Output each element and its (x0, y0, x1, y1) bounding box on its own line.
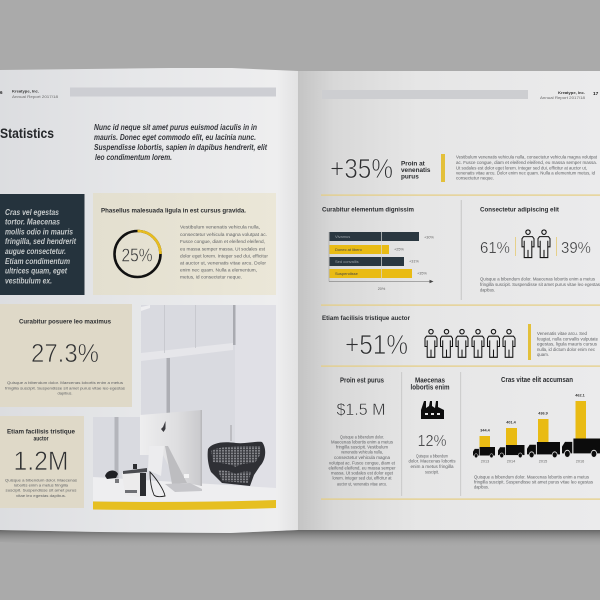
paragraph: +51%: Venenatis vitae arcu. Sed (537, 331, 588, 336)
stat: +35%: +35% (330, 153, 393, 184)
heading: bar chart: Curabitur elementum dignissim (322, 206, 414, 214)
horizontal bar chart: Suspendisse (335, 271, 359, 276)
horizontal bar chart: Sed convallis (335, 259, 359, 264)
page number left: 6 (0, 90, 3, 95)
truck bar chart: 401.4 (506, 420, 517, 424)
horizontal bar chart: +25% (394, 248, 404, 252)
running header left: Kreatype, Inc. (12, 90, 39, 94)
running header left (12, 90, 58, 99)
horizontal bar chart: +31% (409, 260, 419, 264)
label: proin at venenatis purus: venenatis (401, 167, 431, 174)
donut chart 25% (114, 231, 160, 277)
column: $1.5 M: Proin est purus (340, 378, 384, 384)
card paragraph: eu massa semper massa. Ut sodales est (180, 246, 266, 252)
gender split stat: 61% (480, 240, 510, 257)
column: 12% (408, 378, 456, 474)
card paragraph: Fusce congue, diam et eleifend eleifend, (180, 239, 265, 244)
card paragraph: enim nec quam. Nulla a elementum, (180, 268, 257, 272)
paragraph: +51% (537, 331, 599, 357)
panel: 27.3% stat (0, 304, 132, 407)
column: $1.5 M: $1.5 M (336, 400, 386, 419)
column: $1.5 M: venenatis vehicula nulla, (341, 450, 383, 454)
gender split stat: 39% (561, 240, 591, 257)
column: truck chart: Cras vitae elit accumsan (501, 377, 573, 384)
heading: +51%: Etiam facilisis tristique auctor (322, 315, 410, 322)
card paragraph: dolor eget lorem. Integer sed dui, efficitur (180, 254, 269, 258)
yellow band under photo (93, 500, 276, 510)
paragraph: +51%: nulla, id dictum dolor enim nec (537, 347, 595, 352)
label: proin at venenatis purus: purus (401, 174, 419, 180)
computer (140, 410, 202, 492)
column: truck chart: dapibus. (474, 484, 489, 490)
horizontal bar chart: 20% (378, 287, 386, 291)
panel: donut card (93, 193, 276, 295)
truck bar chart: 2013 (481, 460, 489, 464)
card paragraph: consectetur vehicula magna volutpat ac. (180, 232, 267, 237)
intro text: mauris. Donec eget commodo elit, eu lacinia nunc. (94, 132, 256, 142)
panel: 1.2M stat: lobortis enim a metus fringilla (14, 482, 69, 488)
column: $1.5 M: consectetur vehicula magna (334, 455, 391, 460)
column: $1.5 M: auctor ut, venenatis vitae arcu. (337, 482, 387, 486)
running header right: Kreatype, Inc. (558, 91, 585, 95)
panel: 27.3% stat: Quisque a bibendum dolor. Maecenas lobortis enim a metus (7, 380, 123, 385)
horizontal bar chart: +30% (424, 236, 434, 240)
truck bar chart: 344.4 (480, 428, 491, 432)
panel: dark quote: Etiam condimentum (5, 257, 70, 266)
panel: 27.3% stat: fringilla suscipit. Suspendisse sit amet purus vitae leo egestas (5, 386, 125, 390)
card heading: Phasellus malesuada ligula in est cursus gravida. (101, 208, 246, 214)
truck bar chart: 2014 (507, 460, 515, 464)
column: truck chart: fringilla suscipit. Suspendisse sit amet purus vitae leo egestas (474, 480, 593, 484)
panel: 1.2M stat (0, 416, 84, 508)
photo: office desk with computer and chair (93, 305, 276, 501)
column: 12%: lobortis enim (410, 384, 450, 392)
label: proin at venenatis purus (401, 160, 431, 180)
running header left: Annual Report 2017/18 (12, 95, 58, 99)
column: $1.5 M: Quisque a bibendum dolor. (340, 434, 384, 440)
horizontal bar chart: Vivamus (335, 234, 350, 239)
running header right: Annual Report 2017/18 (540, 96, 585, 100)
panel: 1.2M stat: Etiam facilisis tristique (7, 428, 75, 436)
card paragraph (180, 224, 269, 280)
column: 12%: dolor. Maecenas lobortis (408, 458, 456, 464)
panel: right page (298, 71, 600, 530)
chair (208, 442, 265, 486)
intro text (94, 122, 268, 162)
truck bar chart: 462.1 (575, 394, 585, 398)
column: $1.5 M (328, 378, 396, 486)
panel: dark quote: Cras vel egestas (5, 208, 60, 217)
truck bar chart: 2016 (576, 460, 584, 464)
column: $1.5 M: lorem. Integer sed dui, efficitur at (332, 476, 392, 480)
paragraph: gender split: fringilla suscipit. Suspendisse sit amet purus vitae leo egestas (480, 282, 600, 287)
running header right (540, 91, 585, 100)
yellow divider (441, 154, 445, 182)
column: truck chart: Quisque a bibendum dolor. Maecenas lobortis enim a metus (474, 474, 589, 480)
intro text: leo condimentum lorem. (95, 152, 172, 162)
paragraph: +35% (456, 154, 598, 180)
people icon row (425, 329, 515, 357)
intro text: Nunc id neque sit amet purus euismod iaculis in in (94, 122, 257, 132)
header bar left (70, 88, 276, 96)
label: proin at venenatis purus: Proin at (401, 160, 426, 168)
panel: dark quote: vestibulum ex. (5, 276, 52, 286)
truck bar chart (473, 394, 600, 464)
icon: factory (421, 401, 444, 419)
paragraph: +51%: feugiat, nulla convallis vulputate (537, 336, 599, 342)
horizontal bar chart: Donec at libero (335, 247, 363, 252)
paragraph: +35%: venenatis vitae arcu. Dolor enim nec quam. Nulla a elementum metus, id (456, 170, 596, 176)
panel: 27.3% stat: dapibus. (58, 390, 72, 396)
panel: dark quote (0, 194, 84, 295)
paragraph: +51%: quam. (537, 352, 549, 357)
title: Statistics (0, 125, 54, 141)
card paragraph: metus, id consectetur neque. (180, 274, 242, 280)
card paragraph: at auctor ut, venenatis vitae arcu. Dolor (180, 260, 267, 266)
paragraph: gender split (480, 276, 600, 292)
paragraph: +35%: ac. Fusce congue, diam et eleifend eleifend, eu massa semper massa. (456, 160, 597, 165)
column: 12%: enim a metus fringilla (410, 464, 454, 469)
paragraph: +51%: egestas, ligula mauris cursus (537, 342, 597, 346)
panel: dark quote: tortor. Maecenas (5, 218, 61, 226)
intro text: Suspendisse lobortis, sapien in dapibus hendrerit, elit (94, 142, 268, 152)
wall and cabinets (93, 305, 276, 501)
paragraph: gender split: Quisque a bibendum dolor. Maecenas lobortis enim a metus (480, 276, 595, 282)
column: truck chart (473, 377, 600, 490)
column: 12%: Quisque a bibendum (416, 454, 448, 458)
horizontal bar chart (329, 231, 434, 291)
paragraph: +35%: Ut sodales est dolor eget lorem. Integer sed dui, efficitur at auctor ut, (456, 166, 587, 170)
paragraph: gender split: dapibus. (480, 288, 495, 292)
card paragraph: Vestibulum venenatis vehicula nulla, (180, 224, 260, 230)
panel: 1.2M stat: auctor (34, 436, 49, 442)
column: $1.5 M: fringilla suscipit. Vestibulum (336, 444, 389, 450)
column: 12%: 12% (418, 433, 447, 450)
page number right: 17 (593, 91, 599, 97)
panel: 1.2M stat: Quisque a bibendum dolor. Maecenas (5, 478, 77, 482)
desk (93, 477, 276, 501)
panel: dark quote: ultrices quam, eget (5, 266, 67, 276)
truck bar chart: 2015 (539, 460, 547, 464)
page shadow (0, 530, 600, 547)
paragraph: +35%: Vestibulum venenatis vehicula nulla, consectetur vehicula magna volutpat (456, 154, 598, 160)
column: 12%: suscipit. (425, 470, 439, 474)
panel: dark quote: mollis odio in mauris (5, 228, 74, 236)
gender split stat (480, 230, 591, 258)
stat: +51%: +51% (345, 329, 408, 360)
panel: dark quote: augue consectetur. (5, 247, 66, 256)
panel: 27.3% stat: Curabitur posuere leo maximus (19, 318, 111, 326)
truck bar chart: 436.9 (538, 412, 548, 416)
panel: 1.2M stat: vitae leo egestas dapibus. (16, 493, 66, 498)
donut chart 25%: 25% (122, 246, 152, 266)
column: 12%: Maecenas (415, 378, 445, 384)
paragraph: +35%: consectetur neque. (456, 176, 494, 180)
column: $1.5 M: massa. Ut sodales est dolor eget (331, 470, 394, 476)
horizontal bar chart: +35% (417, 272, 427, 276)
yellow divider (528, 324, 531, 360)
column: $1.5 M: volutpat ac. Fusce congue, diam et (329, 460, 396, 466)
heading: gender split: Consectetur adipiscing elit (480, 206, 560, 214)
panel: 1.2M stat: suscipit. Suspendisse sit amet purus (6, 488, 77, 492)
panel: 1.2M stat: 1.2M (14, 446, 68, 476)
header bar right (322, 90, 528, 99)
panel: dark quote: fringilla, sed hendrerit (5, 237, 76, 246)
panel: left page (0, 68, 298, 533)
column: $1.5 M: eleifend eleifend, eu massa semper (328, 466, 396, 470)
column: $1.5 M: Maecenas lobortis enim a metus (331, 440, 393, 444)
panel: 27.3% stat: 27.3% (31, 338, 99, 368)
desk accessories (105, 464, 165, 497)
